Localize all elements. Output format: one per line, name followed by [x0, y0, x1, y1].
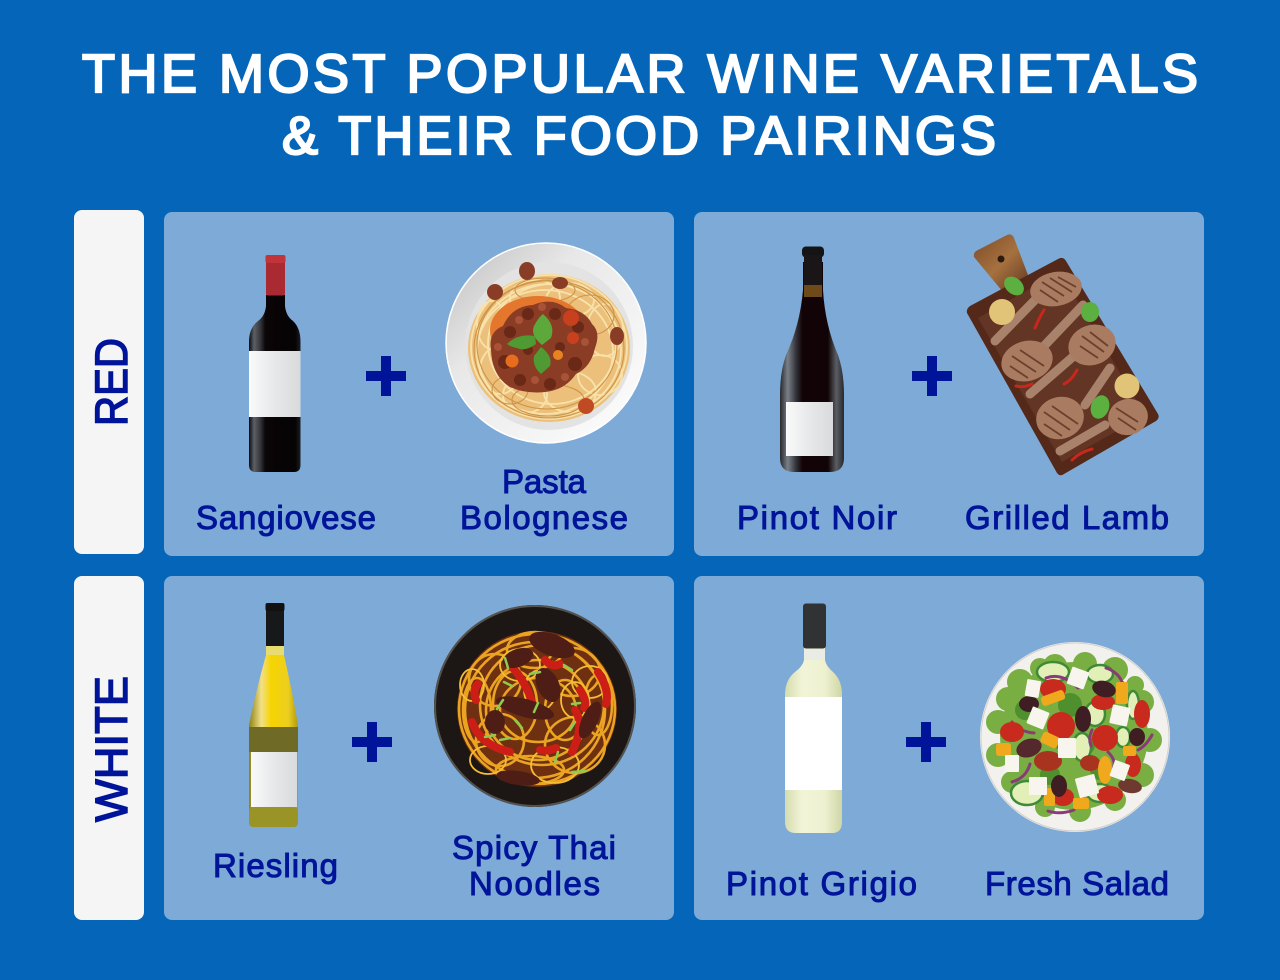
- chilies: [1016, 310, 1092, 460]
- category tab: white: [74, 576, 144, 920]
- red onion: [1012, 668, 1152, 813]
- basil leaves: [507, 314, 552, 374]
- label: Pasta Bolognese: Bolognese: [460, 499, 628, 536]
- label: Pinot Grigio: Pinot Grigio: [726, 865, 917, 902]
- herbs: [1000, 273, 1113, 421]
- icon: fresh salad plate: [980, 642, 1170, 832]
- olives: [1014, 678, 1145, 797]
- yellow peppers: [996, 682, 1136, 809]
- tomatoes: [1000, 679, 1150, 806]
- label: Spicy Thai Noodles: Noodles: [469, 865, 600, 902]
- title: THE MOST POPULAR WINE VARIETALS: [82, 44, 1198, 104]
- category tab: white: WHITE: [86, 676, 137, 822]
- title: [82, 44, 1198, 166]
- panel: Pinot Grigio and fresh salad: [694, 576, 1204, 920]
- category tab: red: RED: [86, 338, 137, 426]
- label: Grilled Lamb: Grilled Lamb: [965, 499, 1169, 536]
- label: Sangiovese: Sangiovese: [196, 499, 376, 536]
- icon: Sangiovese bottle: [249, 255, 300, 472]
- icon: plus: [366, 356, 406, 396]
- category tab: red: [74, 210, 144, 554]
- icon: Pinot Grigio bottle: [785, 604, 842, 833]
- lettuce: [986, 652, 1162, 822]
- panel: Pinot Noir and grilled lamb: [694, 212, 1204, 556]
- panel: Sangiovese and pasta bolognese: [164, 212, 674, 556]
- cucumbers: [1011, 662, 1139, 805]
- icon: plus: [912, 356, 952, 396]
- icon: plus: [906, 722, 946, 762]
- lamb chops: [995, 268, 1152, 451]
- icon: grilled lamb board: [967, 234, 1159, 475]
- label: Spicy Thai Noodles: [452, 829, 616, 902]
- red peppers: [472, 660, 607, 752]
- garlic: [989, 299, 1140, 398]
- label: Pinot Noir: Pinot Noir: [737, 499, 897, 536]
- icon: spicy Thai noodles bowl: [434, 605, 636, 807]
- label: Riesling: Riesling: [213, 847, 338, 884]
- meatballs and tomatoes: [487, 262, 624, 414]
- beef strips: [485, 626, 606, 788]
- title: & THEIR FOOD PAIRINGS: [282, 106, 996, 166]
- label: Fresh Salad: Fresh Salad: [985, 865, 1169, 902]
- icon: plus: [352, 722, 392, 762]
- label: Pasta Bolognese: Pasta: [502, 463, 587, 500]
- panel: Riesling and spicy Thai noodles: [164, 576, 674, 920]
- scallions: [485, 658, 586, 772]
- icon: pasta bolognese plate: [446, 243, 646, 443]
- label: Spicy Thai Noodles: Spicy Thai: [452, 829, 616, 866]
- icon: Riesling bottle: [249, 603, 298, 827]
- label: Pasta Bolognese: [460, 463, 628, 536]
- icon: Pinot Noir bottle: [780, 246, 844, 472]
- feta cubes: [1005, 666, 1131, 798]
